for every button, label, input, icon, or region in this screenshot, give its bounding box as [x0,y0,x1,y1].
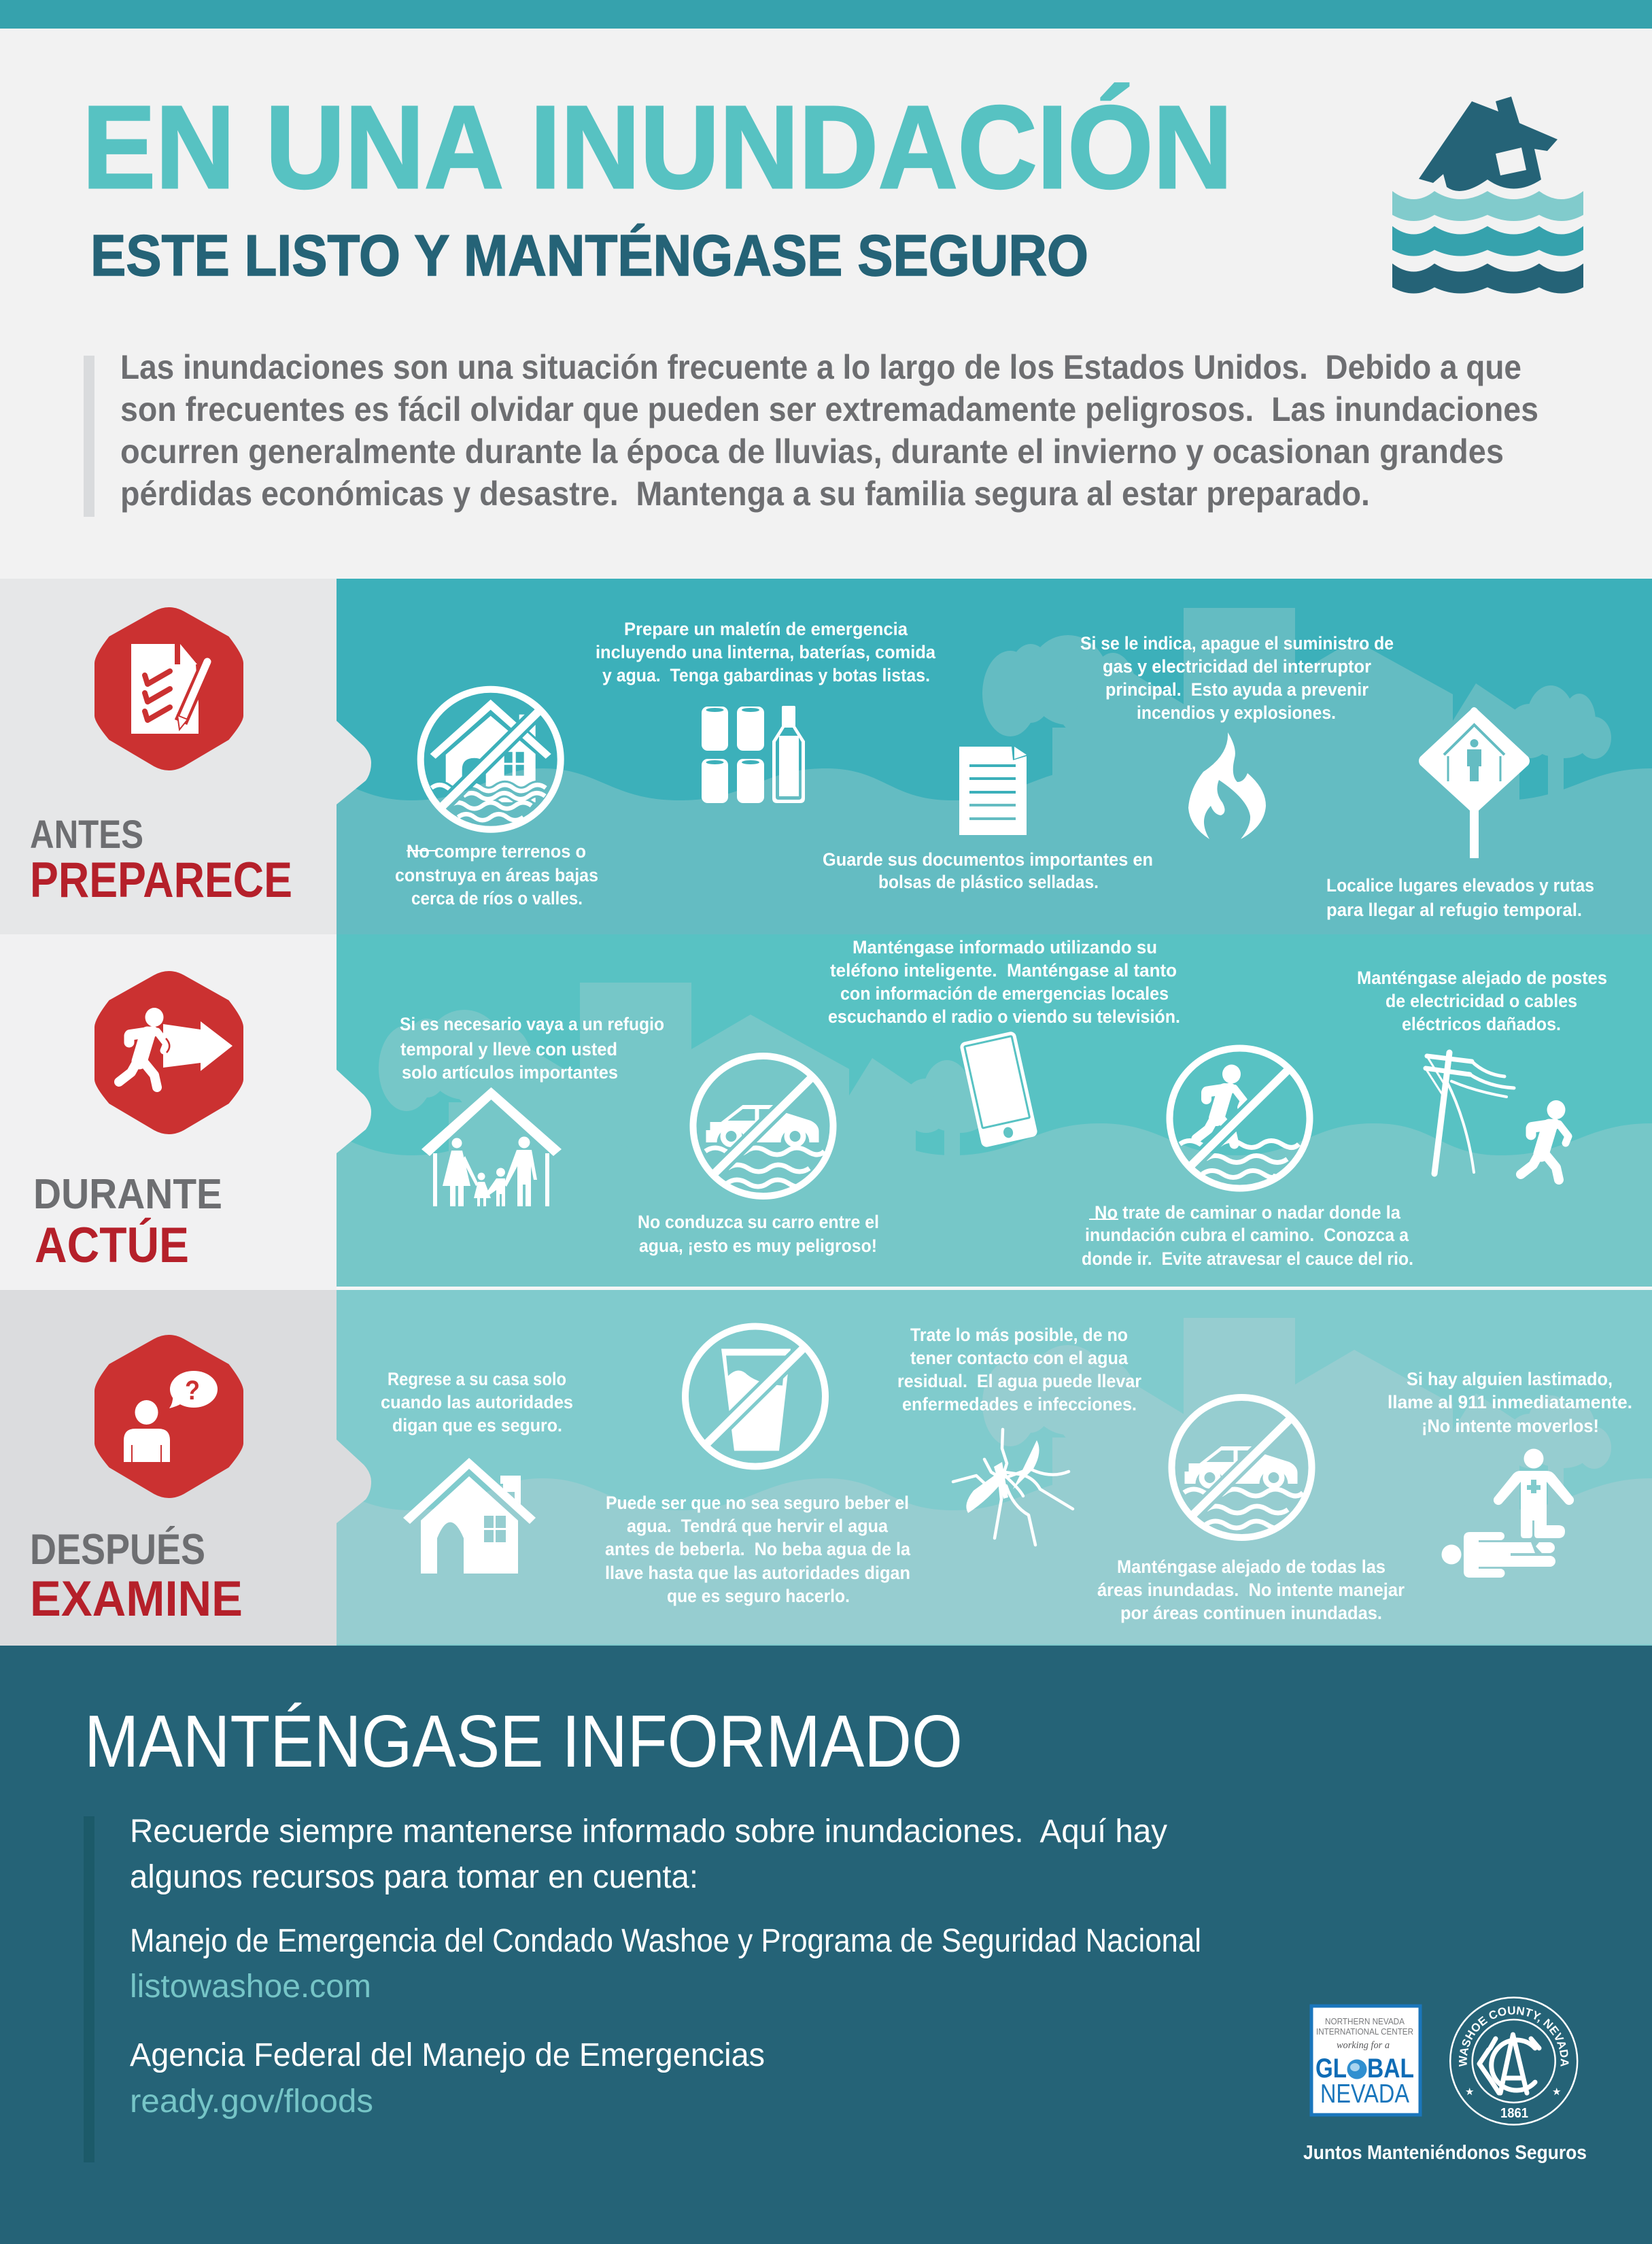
logo: global nevada: INTERNATIONAL CENTER [1316,2027,1413,2037]
panel: durante / actúe [0,934,1652,1290]
text: apague suministro: Si se le indica, apague el suministro de [1080,633,1394,653]
text: apague suministro: principal. Esto ayuda a prevenir [1105,679,1369,700]
intro paragraph: son frecuentes es fácil olvidar que pueden ser extremadamente peligrosos. Las inundaciones [120,390,1538,428]
text: no trate de caminar [1082,1202,1413,1269]
text: prepare maletín: Prepare un maletín de emergencia [624,619,908,639]
text: no compre: cerca de ríos o valles. [411,888,583,908]
panel: antes / preparece [0,579,1652,934]
panel: después / examine [0,1290,1652,1646]
text: manténgase alejado [1097,1557,1405,1623]
text: no compre: No compre terrenos o [407,841,586,862]
icon: no building in flood zones [421,690,561,830]
text: puede ser: agua. Tendrá que hervir el agua [627,1516,889,1536]
text: si hay alguien lastimado: Si hay alguien lastimado, [1407,1369,1613,1389]
logo: washoe county seal: ★ [1465,2086,1474,2098]
logo: global nevada: GL [1315,2054,1347,2084]
logo: washoe county seal: WASHOE COUNTY, NEVADA [1459,2006,1569,2067]
icon: flooded house with waves [1392,97,1583,294]
icon: person with question hexagon [94,1335,243,1498]
icon: batteries and bottle [702,706,805,803]
resource: fema [130,2037,765,2120]
text: trate lo más posible: enfermedades e infecciones. [902,1394,1137,1414]
text: prepare maletín [596,619,936,685]
intro paragraph: Las inundaciones son una situación frecuente a lo largo de los Estados Unidos. Debido a que [120,348,1521,386]
footer intro text: Recuerde siempre mantenerse informado sobre inundaciones. Aquí hay [130,1814,1167,1850]
intro paragraph: pérdidas económicas y desastre. Mantenga a su familia segura al estar preparado. [120,475,1370,513]
text: trate lo más posible: Trate lo más posible, de no [910,1325,1128,1345]
text: postes de electricidad: Manténgase alejado de postes [1357,968,1607,988]
icon: no drinking water [685,1326,825,1466]
section 2 lower hill [272,1123,1652,1289]
text: si hay alguien lastimado [1388,1369,1632,1436]
heading: antes: ANTES [30,813,143,857]
text: regrese a su casa: digan que es seguro. [392,1415,562,1435]
icon: family under roof [421,1087,562,1206]
text: apague suministro: incendios y explosiones. [1137,702,1336,723]
text: regrese a su casa: cuando las autoridades [381,1392,573,1412]
text: manténgase informado [828,937,1180,1027]
icon: runner with arrow hexagon [94,971,243,1134]
resource: washoe: listowashoe.com [130,1969,371,2005]
footer intro text: algunos recursos para tomar en cuenta: [130,1859,698,1895]
text: localice lugares: Localice lugares elevados y rutas [1326,875,1594,896]
text: localice lugares: para llegar al refugio temporal. [1326,900,1582,920]
text: refugio temporal: Si es necesario vaya a un refugio [400,1014,664,1034]
section 3 background [337,1290,1652,1646]
text: manténgase informado: escuchando el radio o viendo su televisión. [828,1006,1180,1027]
icon: smartphone [959,1031,1038,1148]
logo: washoe county seal: 1861 [1500,2106,1528,2121]
header background [0,0,1652,579]
section 3 label panel [0,1290,337,1646]
icon: medic and injured person [1441,1448,1574,1578]
icon: flame [1188,732,1266,839]
text: refugio temporal [400,1014,664,1083]
text: no compre: construya en áreas bajas [395,865,598,885]
text: puede ser: antes de beberla. No beba agua de la [605,1539,911,1559]
text: refugio temporal: solo artículos importantes [402,1062,618,1083]
section 1 background [337,579,1652,934]
text: trate lo más posible: tener contacto con el agua [910,1348,1129,1368]
title: EN UNA INUNDACIÓN [82,81,1233,213]
section 1 lower hill [272,768,1652,934]
text: postes de electricidad [1357,968,1607,1034]
text: guarde documentos [823,849,1153,892]
text: regrese a su casa: Regrese a su casa solo [388,1369,566,1389]
icon: no driving in water [693,1056,833,1196]
subtitle: ESTE LISTO Y MANTÉNGASE SEGURO [90,224,1088,288]
icon: house [403,1458,536,1574]
text: no conduzca: No conduzca su carro entre el [638,1212,879,1232]
text: manténgase informado: Manténgase informado utilizando su [853,937,1157,957]
text: postes de electricidad: de electricidad o cables [1386,991,1577,1011]
text: puede ser: que es seguro hacerlo. [667,1586,850,1606]
top color bar [0,0,1652,29]
heading: preparece: PREPARECE [30,853,292,908]
text: manténgase alejado: Manténgase alejado de todas las [1117,1557,1386,1577]
icon: no walking in flood [1169,1049,1309,1189]
text: regrese a su casa [381,1369,573,1435]
logo: global nevada: NORTHERN NEVADA [1325,2017,1405,2026]
logo: global nevada: BAL [1367,2054,1414,2084]
logo: washoe county seal: ★ [1552,2086,1561,2098]
resource: washoe [130,1923,1201,2005]
resource: fema: Agencia Federal del Manejo de Emergencias [130,2037,765,2073]
text: no trate de caminar: donde ir. Evite atravesar el cauce del rio. [1082,1248,1413,1269]
heading: examine: EXAMINE [30,1571,243,1627]
text: manténgase informado: con información de emergencias locales [840,983,1169,1004]
icon: checklist hexagon [94,607,243,770]
section 2 label panel [0,934,337,1290]
text: manténgase alejado: áreas inundadas. No intente manejar [1097,1580,1405,1600]
panel: manténgase informado [0,1646,1652,2244]
text: refugio temporal: temporal y lleve con usted [400,1039,617,1059]
text: localice lugares [1326,875,1594,920]
text: guarde documentos: bolsas de plástico selladas. [878,872,1099,892]
icon: shelter road sign [1419,707,1530,858]
section 2 background [337,934,1652,1287]
text: si hay alguien lastimado: ¡No intente moverlos! [1422,1416,1599,1436]
heading: durante: DURANTE [33,1171,222,1218]
icon: power pole and walker [1426,1053,1568,1180]
text: manténgase informado: teléfono inteligente. Manténgase al tanto [830,960,1177,981]
text: no trate de caminar: No trate de caminar o nadar donde la [1095,1202,1401,1223]
heading: después: DESPUÉS [30,1526,205,1574]
logo: global nevada [1311,2006,1420,2115]
footer intro text [130,1814,1167,1895]
text: no compre [395,841,598,908]
section 1 scenery [982,608,1611,806]
icon: document [959,747,1027,835]
section 2 bottom rule [337,1287,1652,1290]
text: trate lo más posible: residual. El agua puede llevar [897,1371,1141,1391]
section 2 scenery [379,983,1008,1180]
intro paragraph: ocurren generalmente durante la época de lluvias, durante el invierno y ocasionan grandes [120,432,1504,471]
text: apague suministro [1080,633,1394,723]
intro side bar [84,356,94,517]
icon: no driving near floods [1172,1397,1312,1537]
text: no trate de caminar: inundación cubra el camino. Conozca a [1085,1225,1409,1245]
logo: global nevada: working for a [1337,2040,1390,2051]
intro paragraph [120,348,1538,513]
text: guarde documentos: Guarde sus documentos importantes en [823,849,1153,870]
text: puede ser: Puede ser que no sea seguro beber el [606,1493,909,1513]
text: si hay alguien lastimado: llame al 911 inmediatamente. [1388,1392,1632,1412]
text: puede ser: llave hasta que las autoridades digan [605,1563,910,1583]
text: puede ser [605,1493,911,1606]
section 3 scenery [982,1318,1611,1516]
text: manténgase alejado: por áreas continuen inundadas. [1120,1603,1382,1623]
section 1 arrow notch [337,721,371,804]
logo: global nevada: NEVADA [1320,2079,1409,2109]
text: prepare maletín: incluyendo una linterna, baterías, comida [596,642,936,662]
section 1 label panel [0,579,337,934]
footer heading: MANTÉNGASE INFORMADO [84,1700,963,1783]
section 3 lower hill [272,1478,1652,1644]
text: no conduzca [638,1212,879,1256]
section 3 arrow notch [337,1440,371,1523]
footer side bar [84,1816,94,2162]
logo: washoe county seal [1449,1996,1579,2126]
strike on text [407,850,436,851]
tagline: Juntos Manteniéndonos Seguros [1303,2142,1587,2164]
resource: fema: ready.gov/floods [130,2084,373,2120]
resource: washoe: Manejo de Emergencia del Condado Washoe y Programa de Seguridad Nacional [130,1923,1201,1959]
text: postes de electricidad: eléctricos dañados. [1402,1014,1561,1034]
icon: person with question hexagon: ? [185,1376,200,1406]
heading: actúe: ACTÚE [35,1218,189,1273]
icon: mosquito [953,1429,1073,1545]
text: prepare maletín: y agua. Tenga gabardinas y botas listas. [602,665,930,685]
text: no conduzca: agua, ¡esto es muy peligroso! [639,1236,877,1256]
text: apague suministro: gas y electricidad del interruptor [1103,656,1371,677]
footer background [0,1646,1652,2244]
section 2 arrow notch [337,1070,371,1153]
text: trate lo más posible [897,1325,1141,1414]
